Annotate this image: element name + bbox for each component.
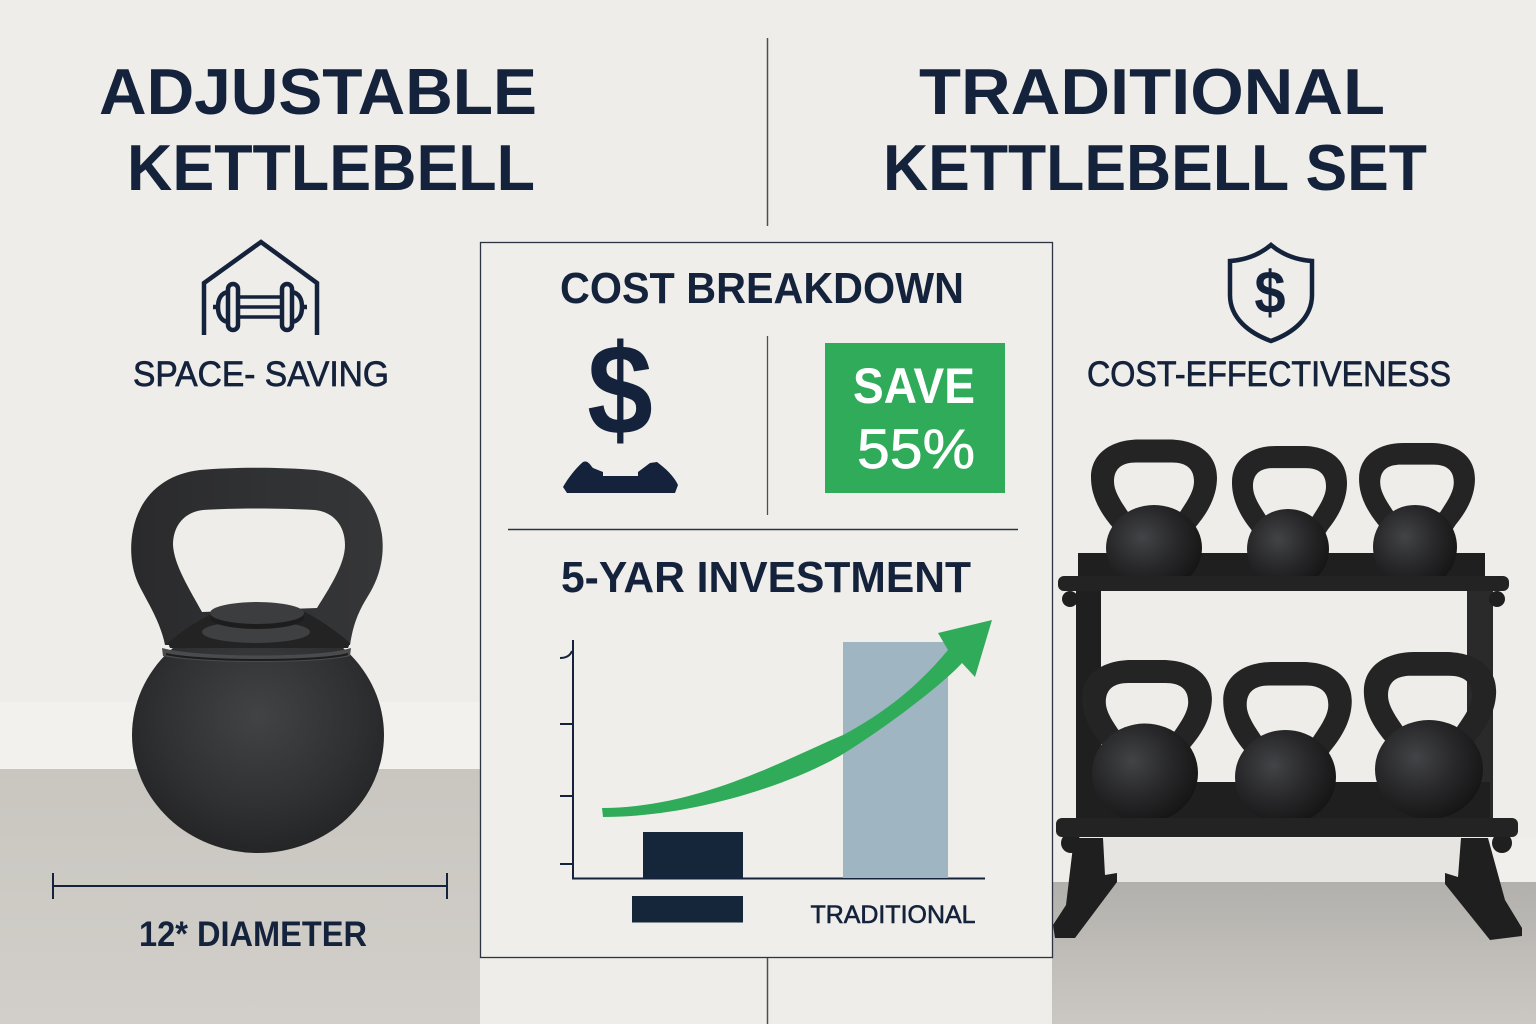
kettlebell handle [131,468,383,645]
growth arrow [602,620,992,817]
label: 12 inch diameter: 12* DIAMETER [139,915,367,954]
title: traditional kettlebell set: KETTLEBELL SET [883,131,1427,204]
title: adjustable kettlebell: KETTLEBELL [127,131,535,204]
rack shelves [1056,576,1518,837]
heading: 5-year investment: 5-YAR INVESTMENT [561,553,971,602]
label: traditional: TRADITIONAL [810,901,976,929]
badge: save 55%: SAVE [853,358,975,414]
heading: cost breakdown: COST BREAKDOWN [560,264,964,313]
inner vertical divider [766,336,768,515]
title: traditional kettlebell set [883,55,1427,204]
badge: save 55% [825,343,1005,493]
bar: adjustable [643,832,743,878]
weight dial discs [202,621,310,643]
top row kettlebells [1091,440,1475,591]
rack with traditional kettlebells [1053,440,1522,940]
icon: garage with dumbbell [204,242,317,335]
legend swatch: adjustable [632,896,743,922]
inner horizontal divider [508,528,1018,530]
adjustable kettlebell illustration [131,468,384,853]
icon: shield with dollar: $ [1254,260,1286,326]
icon: dollar on hand [563,318,678,493]
badge: save 55%: 55% [857,417,975,480]
kettlebell body [132,617,384,853]
panel: cost breakdown [480,242,1052,958]
title: adjustable kettlebell: ADJUSTABLE [99,55,537,128]
bar chart [560,620,992,929]
kettlebell collar [168,612,350,648]
bottom row kettlebells [1082,652,1496,824]
title: adjustable kettlebell [99,55,537,204]
label: space-saving: SPACE- SAVING [133,355,389,394]
axes [560,640,985,878]
icon: dollar on hand: $ [587,318,653,462]
center divider [766,38,768,1024]
icon: shield with dollar [1230,245,1312,341]
rack back frame [1053,553,1522,940]
bar: traditional [843,642,948,878]
label: cost-effectiveness: COST-EFFECTIVENESS [1087,355,1451,394]
title: traditional kettlebell set: TRADITIONAL [919,55,1385,128]
dimension line [53,873,447,899]
